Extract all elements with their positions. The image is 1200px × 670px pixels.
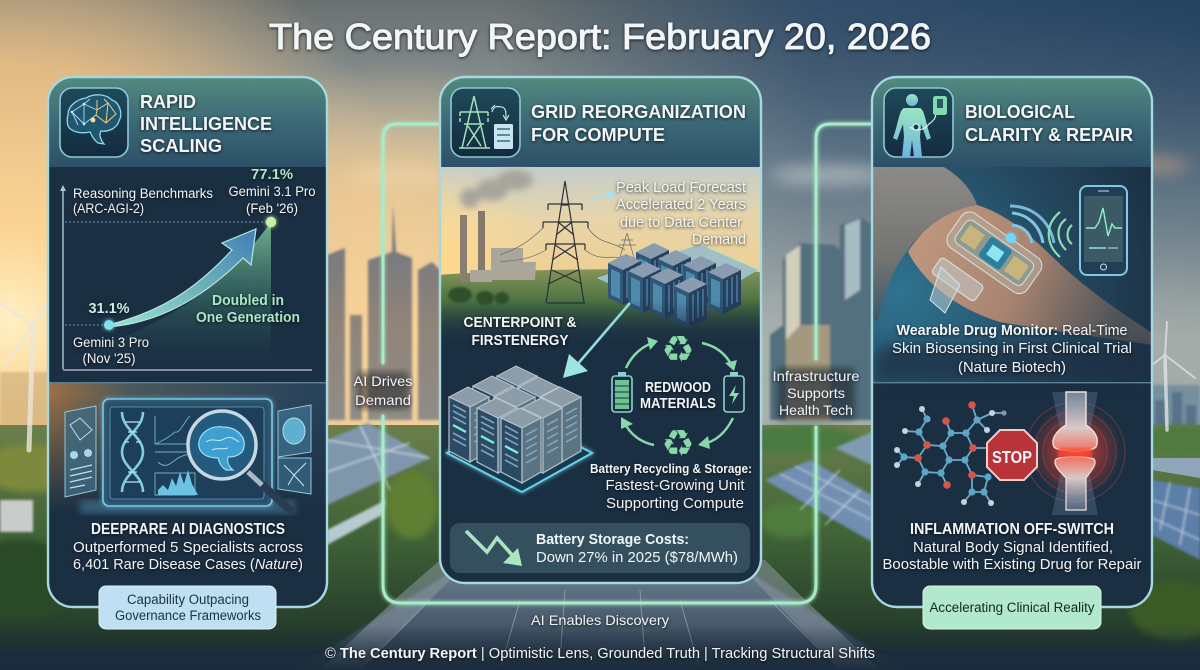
heading: SCALING: [140, 135, 222, 156]
illustration: power plant, pylon and data center: [440, 167, 761, 345]
heading: [965, 101, 1133, 145]
chart: reasoning benchmarks: (Feb '26): [246, 201, 298, 216]
label: Infrastructure Supports Health Tech: Supports: [787, 385, 845, 401]
heading: FOR COMPUTE: [531, 124, 665, 145]
heading: GRID REORGANIZATION: [531, 101, 746, 122]
callout: capability outpacing: Capability Outpacing: [127, 592, 249, 607]
heading: BIOLOGICAL: [965, 101, 1075, 122]
label: AI Drives Demand: Demand: [355, 392, 411, 408]
illustration: battery recycling loop: REDWOOD: [645, 380, 711, 396]
callout: accelerating clinical reality: Accelerating Clinical Reality: [930, 600, 1095, 615]
chart: reasoning benchmarks: Doubled in: [212, 293, 284, 309]
footer: © The Century Report | Optimistic Lens, Grounded Truth | Tracking Structural Shifts: [325, 645, 875, 662]
callout: peak load forecast: Demand: [692, 232, 746, 248]
text block: DeepRare: Outperformed 5 Specialists across: [73, 540, 303, 556]
illustration: AI diagnostics screen: [65, 399, 311, 514]
illustration: battery recycling loop: ♻: [661, 422, 695, 465]
illustration: arm with wearable biosensor: [872, 167, 1152, 383]
arrow: growth: [108, 229, 256, 327]
chart: reasoning benchmarks: 31.1%: [88, 301, 130, 317]
label: Infrastructure Supports Health Tech: Infrastructure: [772, 368, 860, 384]
label: Infrastructure Supports Health Tech: Health Tech: [779, 402, 853, 418]
stat box: battery storage costs: [450, 523, 750, 573]
label: CenterPoint & FirstEnergy: [464, 315, 577, 349]
text block: wearable drug monitor: Wearable Drug Monitor: Real-Time: [896, 323, 1128, 339]
illustration: server cluster: [447, 366, 592, 492]
label: AI Enables Discovery: AI Enables Discovery: [531, 612, 669, 628]
callout: peak load forecast: Peak Load Forecast: [616, 180, 746, 196]
illustration: molecule, stop sign and inflamed knee: [894, 392, 1125, 515]
icon: pylon and server: [451, 88, 520, 157]
text block: inflammation off-switch: INFLAMMATION OFF-SWITCH: [910, 521, 1114, 538]
label: Infrastructure Supports Health Tech: [772, 368, 860, 418]
solar panels: [327, 423, 1200, 560]
chart: reasoning benchmarks: (ARC-AGI-2): [73, 201, 144, 216]
icon: glowing brain: [60, 88, 128, 157]
chart: reasoning benchmarks: One Generation: [196, 310, 300, 326]
text block: DeepRare: 6,401 Rare Disease Cases (Nature): [73, 557, 303, 573]
illustration: battery recycling loop: [612, 328, 744, 465]
heading: RAPID: [140, 91, 196, 112]
icon: body with drug monitor: [884, 88, 953, 157]
heading: CLARITY & REPAIR: [965, 124, 1133, 145]
illustration: battery recycling loop: MATERIALS: [640, 396, 716, 412]
panel: grid reorganization: [440, 77, 761, 583]
text block: wearable drug monitor: Skin Biosensing in First Clinical Trial: [892, 341, 1132, 357]
panel: biological clarity and repair: [872, 77, 1152, 607]
title: The Century Report: February 20, 2026: [269, 16, 931, 57]
text block: DeepRare: DEEPRARE AI DIAGNOSTICS: [91, 521, 285, 538]
callout: capability outpacing: Governance Frameworks: [115, 608, 261, 623]
label: CenterPoint & FirstEnergy: CENTERPOINT &: [464, 315, 577, 331]
chart: reasoning benchmarks: Gemini 3 Pro: [73, 335, 149, 350]
heading: INTELLIGENCE: [140, 113, 272, 134]
callout: capability outpacing: [99, 586, 276, 629]
text block: battery recycling: Supporting Compute: [606, 496, 744, 512]
chart: reasoning benchmarks: 77.1%: [251, 167, 293, 183]
connector: AI enables discovery loop: [383, 124, 872, 603]
heading: [140, 91, 272, 156]
chart: reasoning benchmarks: (Nov '25): [82, 351, 136, 366]
callout: peak load forecast: Accelerated 2 Years: [616, 197, 746, 213]
wind turbines: [0, 300, 1195, 450]
text block: inflammation off-switch: Natural Body Signal Identified,: [913, 540, 1113, 556]
chart: reasoning benchmarks: [60, 167, 316, 370]
text block: wearable drug monitor: (Nature Biotech): [958, 360, 1066, 376]
callout: accelerating clinical reality: [923, 586, 1101, 629]
heading: [531, 101, 746, 145]
stat box: battery storage costs: Battery Storage Costs:: [536, 531, 689, 548]
text block: battery recycling: Fastest-Growing Unit: [606, 478, 744, 494]
illustration: battery recycling loop: ♻: [661, 328, 695, 371]
callout: peak load forecast: [616, 180, 746, 248]
text block: DeepRare: [73, 521, 303, 573]
text block: battery recycling: [590, 462, 752, 512]
text block: inflammation off-switch: Boostable with Existing Drug for Repair: [882, 557, 1142, 573]
panel: rapid intelligence scaling: [48, 77, 327, 607]
chart: reasoning benchmarks: Reasoning Benchmarks: [73, 186, 213, 201]
text block: battery recycling: Battery Recycling & Storage:: [590, 462, 752, 476]
highway: [295, 560, 905, 670]
label: AI Drives Demand: [354, 372, 412, 408]
text block: inflammation off-switch: [882, 521, 1142, 573]
text block: wearable drug monitor: [892, 323, 1132, 376]
label: CenterPoint & FirstEnergy: FIRSTENERGY: [472, 333, 569, 349]
chart: reasoning benchmarks: Gemini 3.1 Pro: [228, 184, 316, 199]
illustration: molecule, stop sign and inflamed knee: STOP: [992, 447, 1032, 467]
label: AI Drives Demand: AI Drives: [354, 373, 412, 389]
stat box: battery storage costs: Down 27% in 2025 ($78/MWh): [536, 549, 738, 566]
arrow: plant to servers: [563, 303, 630, 378]
callout: peak load forecast: due to Data Center: [620, 215, 742, 231]
